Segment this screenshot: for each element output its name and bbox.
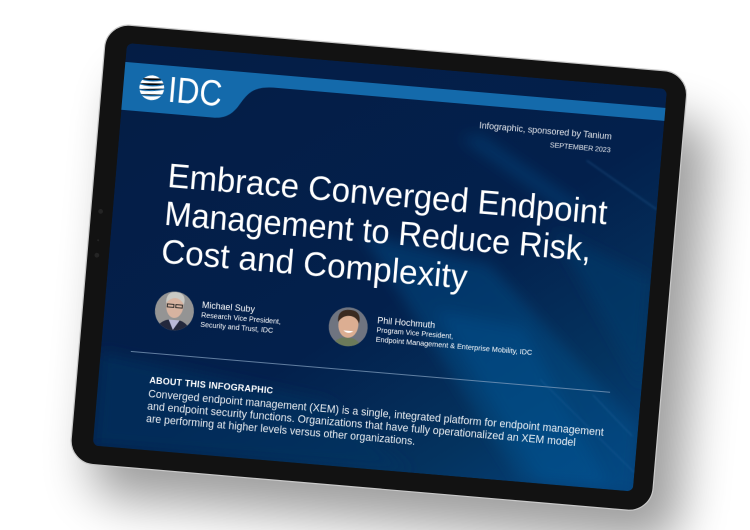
role: Research Vice President,: [201, 310, 281, 326]
title: Management to Reduce Risk,: [163, 195, 593, 269]
divider: [131, 351, 610, 392]
logo wordmark: IDC: [166, 69, 224, 114]
drop shadow: [88, 73, 712, 530]
title: [162, 164, 608, 295]
date: SEPTEMBER 2023: [550, 140, 611, 154]
side camera marks: [94, 209, 103, 258]
logo globe: [139, 75, 164, 100]
speaker: Phil Hochmuth: Endpoint Management & Enterprise Mobility, IDC: [375, 335, 533, 357]
screen background: [93, 43, 667, 492]
about body text: Converged endpoint management (XEM) is a single, integrated platform for endpoint management: [148, 388, 604, 439]
about body text: are performing at higher levels versus other organizations.: [146, 413, 416, 448]
title: Embrace Converged Endpoint: [166, 157, 609, 232]
role: Program Vice President,: [376, 325, 454, 341]
about body text: and endpoint security functions. Organizations that have fully operationalized an XEM model: [147, 401, 576, 449]
speaker: Michael Suby: Security and Trust, IDC: [200, 320, 274, 335]
tablet: [69, 23, 688, 512]
about heading: ABOUT THIS INFOGRAPHIC: [149, 375, 274, 396]
blue header band: [121, 62, 666, 121]
screen: [93, 43, 667, 492]
IDC logo: [139, 75, 222, 106]
speaker: Michael Suby: [154, 291, 280, 333]
name: Phil Hochmuth: [377, 315, 436, 331]
tablet body: [69, 23, 688, 512]
portrait: Phil Hochmuth: [328, 307, 368, 346]
title: Cost and Complexity: [160, 233, 469, 297]
portrait: Michael Suby: [154, 291, 194, 331]
speaker: Phil Hochmuth: [328, 307, 532, 355]
light streaks: [93, 105, 662, 492]
sponsor line: Infographic, sponsored by Tanium: [479, 120, 612, 141]
name: Michael Suby: [202, 300, 256, 315]
